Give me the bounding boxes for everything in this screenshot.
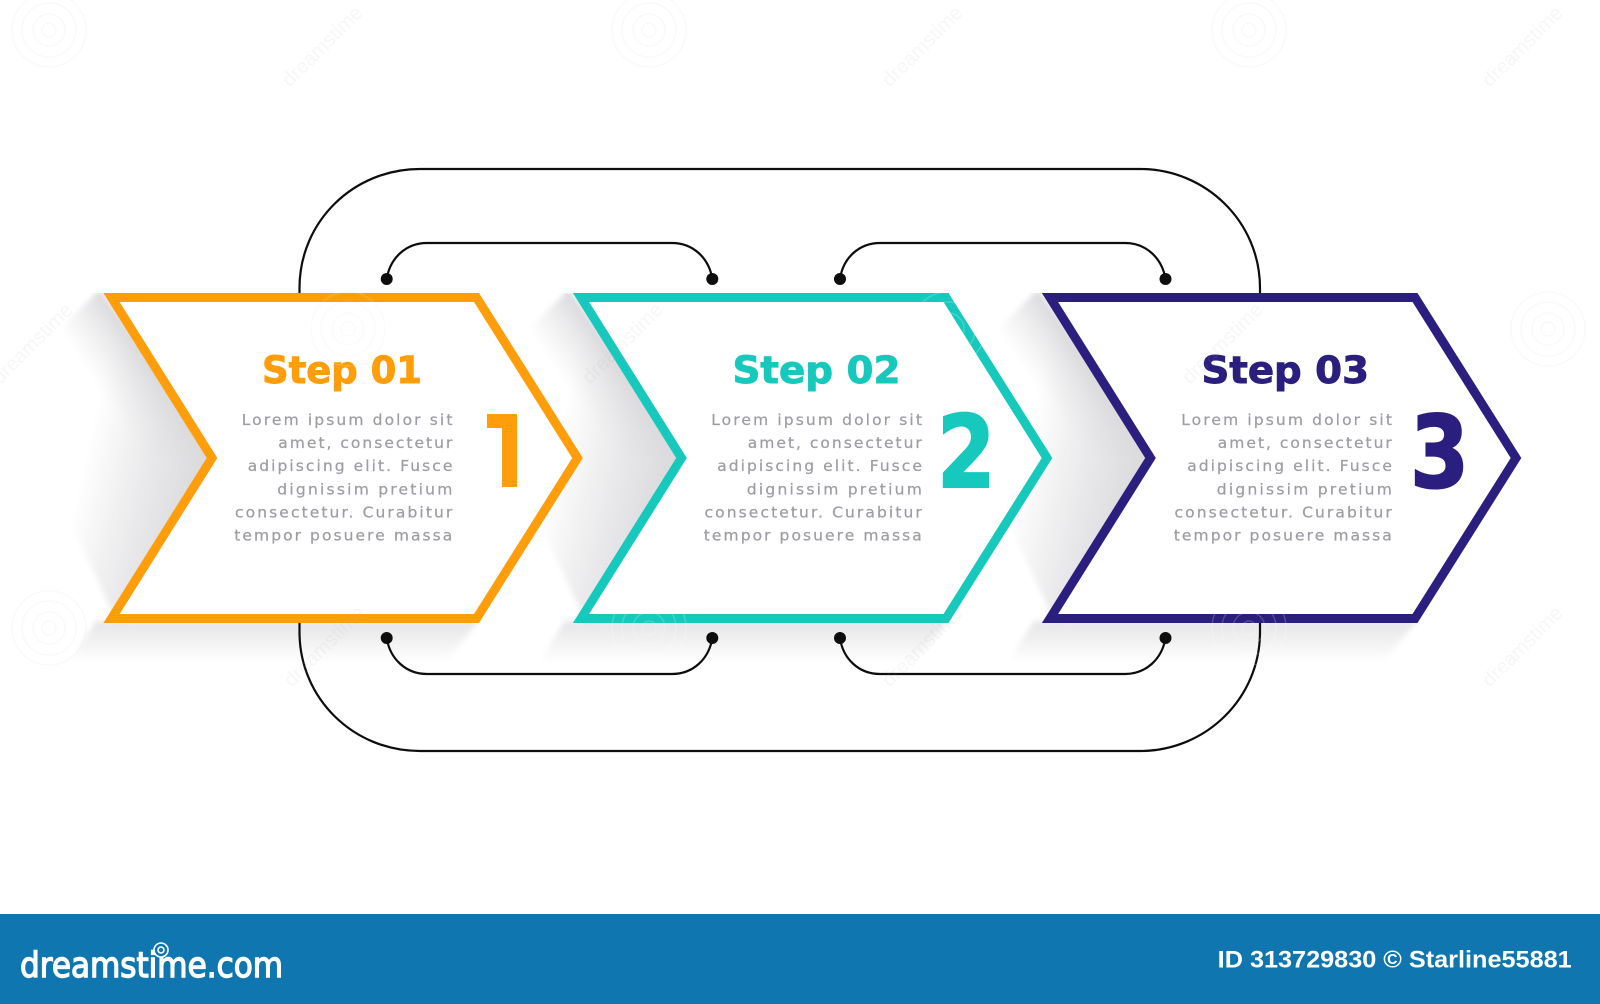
watermark text: dreamstime [280, 602, 369, 692]
body text: step 1: amet, consectetur [278, 434, 453, 452]
body text: step 2: tempor posuere massa [704, 526, 922, 544]
watermark text: dreamstime [578, 299, 667, 389]
body text: step 2: adipiscing elit. Fusce [717, 457, 922, 475]
outer connector loop [300, 169, 1260, 751]
watermark text: dreamstime [1478, 602, 1567, 692]
body text: step 3: Lorem ipsum dolor sit [1181, 411, 1392, 429]
watermark text: dreamstime [878, 602, 967, 692]
footer logo: dreamstime.com: dreamstime.com [20, 946, 283, 986]
watermark spirals [12, 0, 1585, 665]
body text: step 2: consectetur. Curabitur [704, 503, 922, 521]
body text: step 1: adipiscing elit. Fusce [248, 457, 452, 475]
body text: step 2: amet, consectetur [748, 434, 922, 452]
body text: step 2 [704, 411, 922, 544]
body text: step 3: tempor posuere massa [1174, 526, 1392, 544]
small connector: top left [381, 243, 718, 285]
watermark text: dreamstime [278, 2, 367, 92]
body text: step 1: consectetur. Curabitur [235, 503, 453, 521]
body text: step 1: dignissim pretium [277, 480, 452, 498]
panel: step 2 arrow [581, 298, 1047, 618]
body text: step 3: adipiscing elit. Fusce [1187, 457, 1392, 475]
number 2: 2 [937, 394, 995, 511]
panel: step 1 arrow [112, 298, 578, 618]
watermark text: dreamstime [1178, 299, 1267, 389]
panel: step 3 arrow [1050, 298, 1516, 618]
body text: step 1: Lorem ipsum dolor sit [242, 411, 452, 429]
number 3: 3 [1410, 394, 1469, 511]
small connector: top right [834, 243, 1172, 285]
body text: step 2: dignissim pretium [747, 480, 922, 498]
heading: step 01: Step 01 [262, 349, 422, 392]
number 1: 1 [476, 396, 537, 511]
body text: step 1: tempor posuere massa [234, 526, 452, 544]
small connector: bottom right [834, 632, 1172, 674]
watermark text: dreamstime [878, 2, 967, 92]
body text: step 1 [234, 411, 453, 544]
body text: step 3 [1174, 411, 1392, 544]
body text: step 3: amet, consectetur [1218, 434, 1392, 452]
drop shadows behind arrows [40, 289, 1417, 662]
footer credit: ID 313729830 © Starline55881 [1218, 947, 1572, 974]
body text: step 3: consectetur. Curabitur [1174, 503, 1392, 521]
body text: step 3: dignissim pretium [1217, 480, 1392, 498]
footer bar [0, 914, 1600, 1004]
body text: step 2: Lorem ipsum dolor sit [711, 411, 922, 429]
arrow outline orange [112, 298, 578, 618]
arrow outline navy [1050, 298, 1516, 618]
small connector: bottom left [381, 632, 718, 674]
watermark text: dreamstime [1478, 2, 1567, 92]
watermark text [0, 2, 1567, 692]
heading: step 02: Step 02 [732, 349, 900, 392]
arrow outline teal [581, 298, 1047, 618]
heading: step 03: Step 03 [1202, 349, 1369, 392]
